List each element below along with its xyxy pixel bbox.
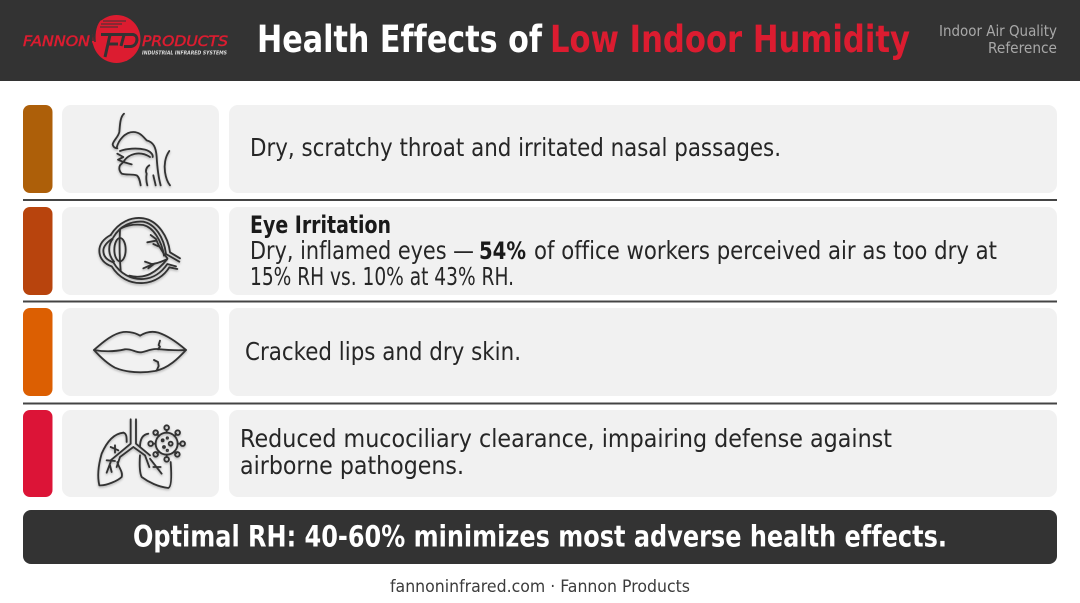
- effect text: Dry, inflamed eyes —: [250, 236, 474, 265]
- icon: lungs with virus: [98, 419, 185, 488]
- row 1: throat: [23, 105, 1057, 193]
- icon: eye cross-section: [99, 218, 180, 283]
- row 3: lips: [23, 308, 1057, 396]
- title: Low Indoor Humidity: [550, 18, 910, 61]
- header note: Indoor Air Quality: [939, 22, 1057, 40]
- effect text: Reduced mucociliary clearance, impairing defense against: [240, 424, 892, 453]
- icon panel: [62, 207, 219, 295]
- header note: Reference: [988, 39, 1057, 57]
- effect text: Eye Irritation: [250, 211, 391, 239]
- logo: Fannon Products: PRODUCTS: [142, 34, 228, 50]
- effect text: 54%: [479, 237, 526, 265]
- icon panel: [62, 105, 219, 193]
- callout: optimal RH: [23, 510, 1057, 564]
- text panel: [229, 308, 1057, 396]
- effect text: [250, 211, 997, 291]
- text panel: [229, 105, 1057, 193]
- severity bar: [23, 105, 52, 193]
- icon: throat and nasal passage: [113, 114, 170, 185]
- logo: Fannon Products: [23, 15, 228, 63]
- icon panel: [62, 410, 219, 497]
- effect text: of office workers perceived air as too dry at: [534, 236, 997, 265]
- severity bar: [23, 410, 52, 497]
- severity bar: [23, 308, 52, 396]
- title: [257, 18, 910, 61]
- header note: [939, 22, 1057, 57]
- severity bar: [23, 207, 52, 295]
- footer: fannoninfrared.com · Fannon Products: [390, 577, 690, 596]
- header band: [0, 0, 1080, 81]
- effect text: Dry, scratchy throat and irritated nasal passages.: [250, 133, 781, 162]
- text panel: [229, 207, 1057, 295]
- effect text: Cracked lips and dry skin.: [245, 337, 521, 366]
- effect text: airborne pathogens.: [240, 451, 464, 480]
- text panel: [229, 410, 1057, 497]
- effect text: 15% RH vs. 10% at 43% RH.: [250, 262, 514, 291]
- row 2: eye: [23, 207, 1057, 295]
- row 4: lungs: [23, 410, 1057, 497]
- icon: cracked lips: [94, 332, 186, 372]
- effect text: [240, 424, 892, 480]
- logo: Fannon Products: FANNON: [23, 34, 91, 50]
- icon panel: [62, 308, 219, 396]
- title: Health Effects of: [257, 18, 543, 61]
- logo: Fannon Products: INDUSTRIAL INFRARED SYSTEMS: [142, 50, 227, 56]
